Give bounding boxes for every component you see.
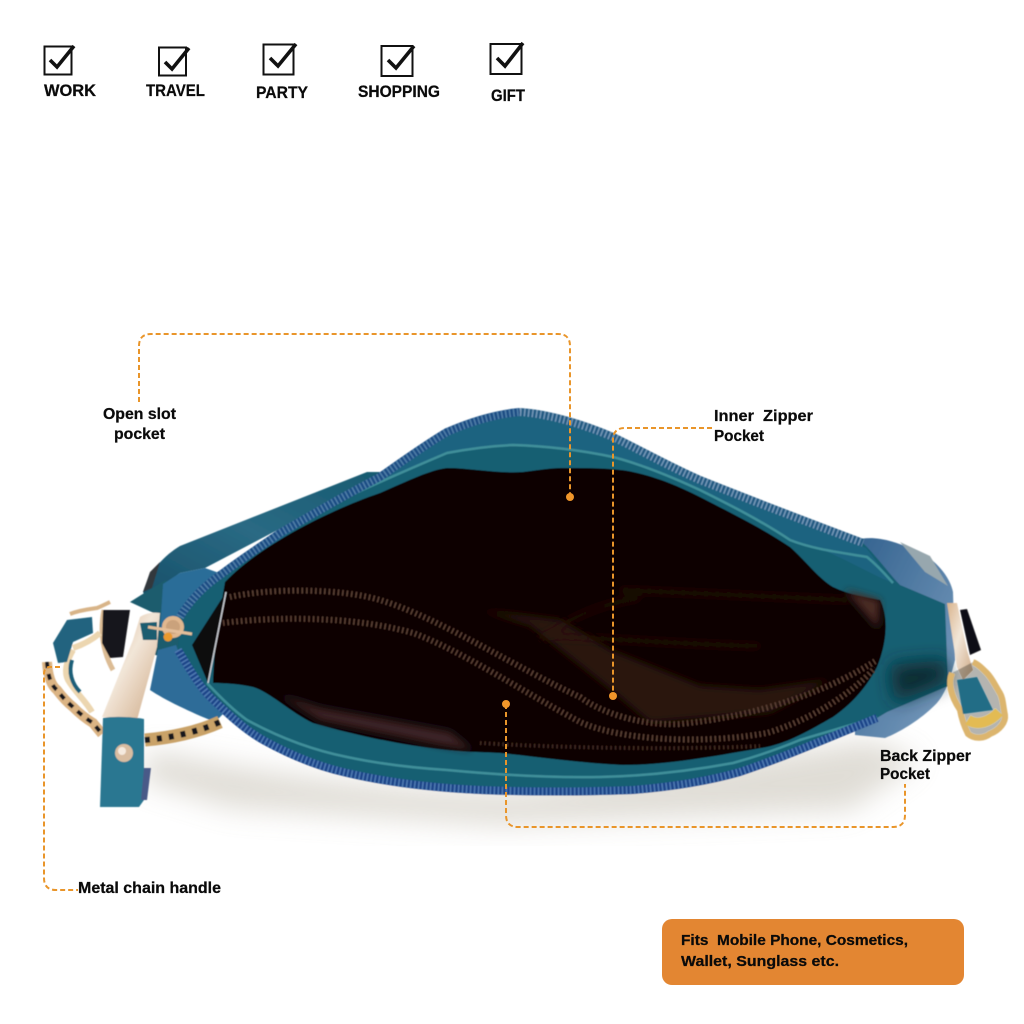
right outer panel [855,538,955,738]
left dark teal gusset [130,580,190,660]
capacity note: Fits Mobile Phone, Cosmetics, [681,932,908,949]
blue zippers [178,412,877,792]
callout: open slot pocket [103,334,574,501]
item: party: PARTY [256,83,309,102]
callout: inner zipper pocket: Inner Zipper [714,408,813,425]
item: gift [490,43,526,105]
item: gift: GIFT [491,86,526,105]
callout: open slot pocket: Open slot [103,406,176,423]
inner lining folds [280,590,880,750]
rivet [115,744,133,762]
callout: back zipper pocket: Back Zipper [880,748,971,765]
bag photo [47,412,1005,825]
item: travel: TRAVEL [146,81,205,100]
callout: inner zipper pocket [609,408,813,700]
capacity note: Wallet, Sunglass etc. [681,953,839,970]
callout: back zipper pocket [502,700,971,827]
item: shopping: SHOPPING [358,82,440,101]
callout: inner zipper pocket: Pocket [714,428,764,445]
callout: metal chain handle: Metal chain handle [78,880,221,897]
left suede panels [160,568,222,630]
right inner shadow [890,660,948,702]
right gold strap fitting [947,603,973,680]
item: work: WORK [44,81,97,100]
item: party [256,44,309,102]
left outer panel [143,472,388,605]
teal leather tab [100,717,144,807]
capacity note [662,919,964,985]
black right tab [960,609,981,655]
inner zipper tapes [223,591,877,748]
main shell [178,412,948,792]
inner rim highlights [207,445,893,777]
black zipper stop [192,592,226,683]
usage checklist [44,43,526,105]
zipper slider [164,618,182,636]
black left tab [102,610,130,658]
callout: back zipper pocket: Pocket [880,766,930,783]
callout: open slot pocket: pocket [114,426,165,443]
callout: metal chain handle [44,667,221,897]
left teal strap knot [53,617,93,663]
top tape [230,414,893,583]
left chain handle [47,602,220,740]
ground shadow [140,740,920,825]
dark lining [213,468,886,765]
right teal strap loop [957,677,993,714]
item: work [44,46,97,100]
item: shopping [358,46,440,101]
right chain handle [950,662,1005,738]
item: travel [146,48,205,100]
metal zipper pull [102,613,160,720]
